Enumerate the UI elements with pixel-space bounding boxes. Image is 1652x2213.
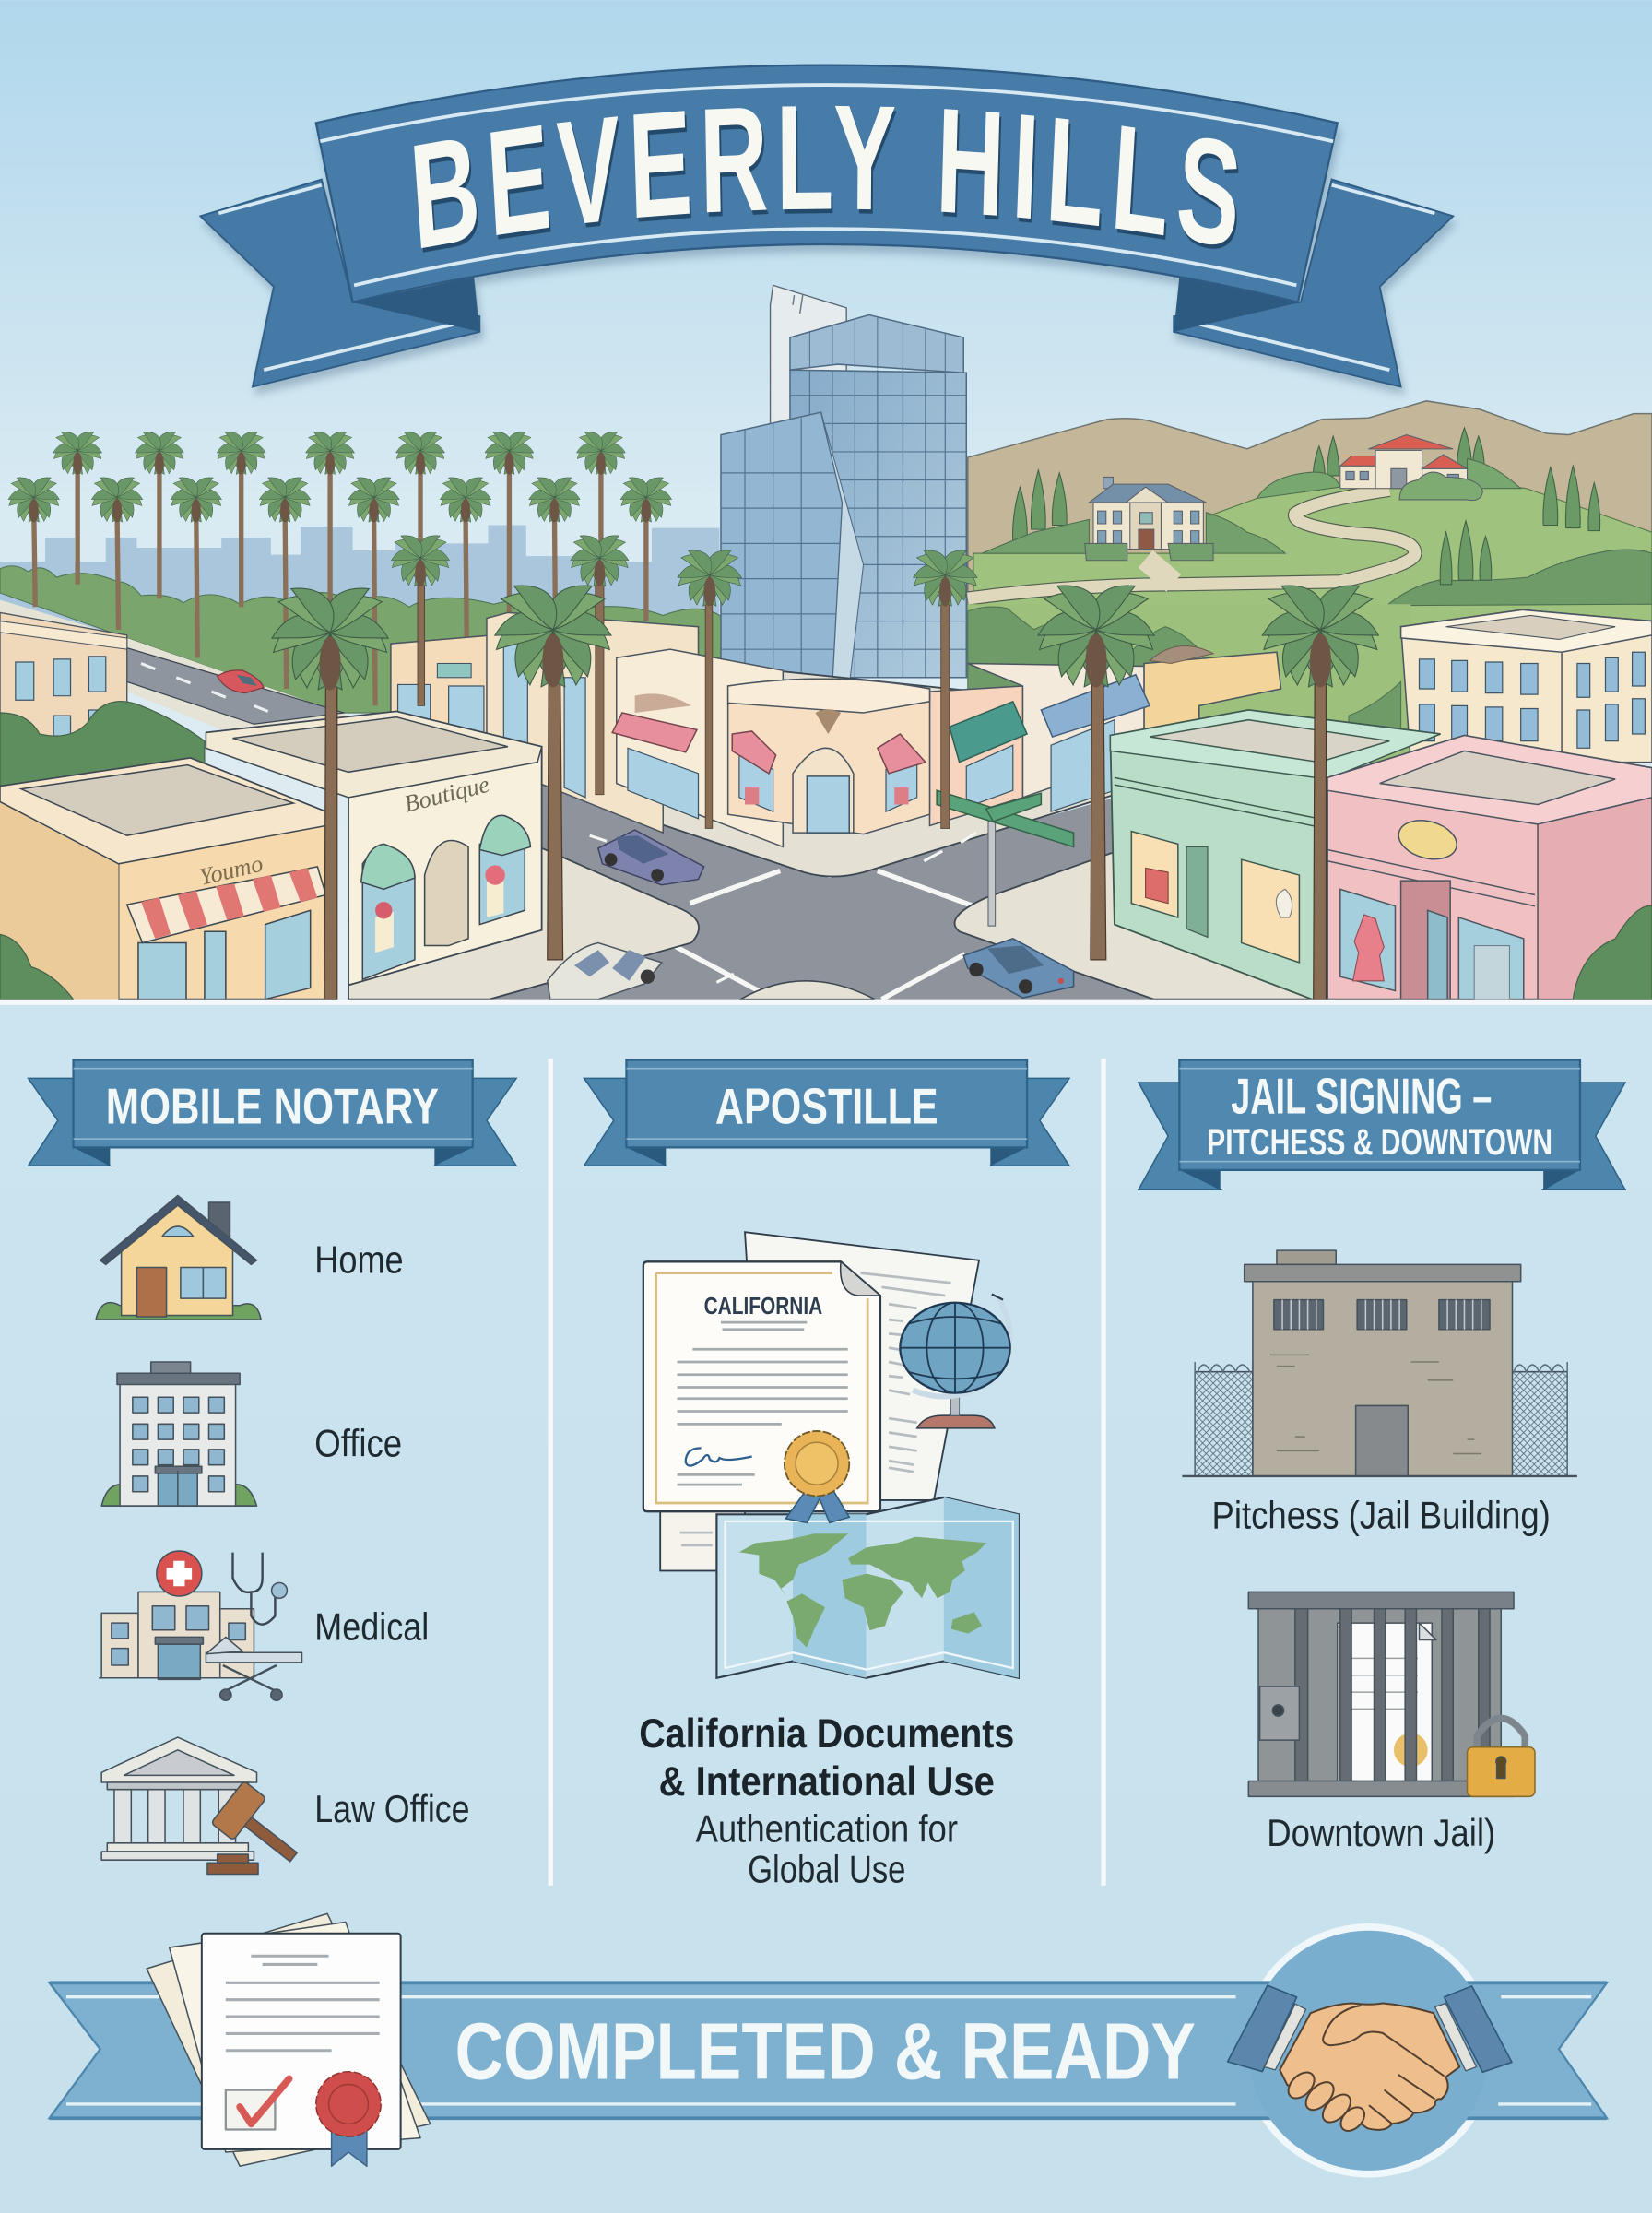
far right cream building xyxy=(1401,609,1652,763)
icon: office xyxy=(101,1362,257,1506)
boutique building: Boutique xyxy=(402,771,492,818)
road intersection xyxy=(479,784,1171,1000)
label: law office: Law Office xyxy=(314,1788,470,1830)
side street xyxy=(0,600,353,748)
label: office: Office xyxy=(314,1423,402,1465)
tan mountains xyxy=(968,401,1652,678)
certificate: CALIFORNIA xyxy=(704,1292,822,1320)
purple car xyxy=(598,830,704,885)
back left shops row xyxy=(391,612,783,846)
corner storefront xyxy=(728,679,929,834)
ribbon: apostille: APOSTILLE xyxy=(715,1077,938,1134)
bush bottom left xyxy=(0,934,74,1000)
top sidewalk xyxy=(539,663,1115,877)
distant city skyline xyxy=(0,526,719,663)
ribbon: mobile notary xyxy=(29,1059,516,1166)
white band between scene and services xyxy=(0,1000,1652,1005)
icon: medical xyxy=(99,1551,301,1700)
street sign xyxy=(937,790,1074,926)
icon: pitchess jail building xyxy=(1182,1250,1577,1476)
silver car xyxy=(548,942,662,1000)
ribbon: jail signing xyxy=(1139,1059,1625,1189)
hedge behind shops middle xyxy=(1122,627,1199,678)
certificate xyxy=(643,1261,880,1511)
main ribbon xyxy=(316,65,1338,302)
apostille caption xyxy=(639,1711,1014,1891)
red car xyxy=(218,670,264,693)
glass skyscraper xyxy=(721,285,966,686)
hedges beside valley mansion xyxy=(982,513,1285,553)
winding driveway xyxy=(968,490,1415,598)
world map xyxy=(716,1497,1019,1678)
hill mansion xyxy=(1340,435,1482,501)
label: pitchess: Pitchess (Jail Building) xyxy=(1212,1495,1551,1537)
pink awning xyxy=(612,713,697,752)
right ribbon tail xyxy=(1174,180,1453,387)
bottom sidewalk xyxy=(740,981,875,1000)
icon: home xyxy=(96,1195,261,1320)
back document xyxy=(745,1232,979,1500)
circle badge xyxy=(1248,1931,1488,2171)
hill bushes xyxy=(1257,459,1521,498)
icon: downtown jail cell xyxy=(1248,1592,1535,1796)
globe xyxy=(900,1295,1010,1428)
back lower sheet xyxy=(660,1496,745,1570)
youmo building xyxy=(0,758,326,1000)
white ring of badge xyxy=(1242,1923,1495,2178)
ribbon band xyxy=(50,1982,1607,2118)
apostille illustration xyxy=(643,1232,1019,1678)
hedges right of the hills xyxy=(1386,550,1652,606)
ribbon: apostille xyxy=(584,1059,1069,1166)
green hills xyxy=(974,480,1652,763)
icon: document stack with seal xyxy=(147,1913,431,2166)
ribbon: mobile notary: MOBILE NOTARY xyxy=(106,1077,439,1134)
mid palm trees xyxy=(390,530,979,829)
left ribbon tail xyxy=(200,180,479,387)
label: downtown jail: Downtown Jail) xyxy=(1267,1812,1495,1854)
ribbon: jail signing: PITCHESS & DOWNTOWN xyxy=(1207,1122,1552,1163)
apostille caption: Global Use xyxy=(748,1849,905,1891)
banner text: COMPLETED & READY xyxy=(455,2006,1196,2096)
title text xyxy=(414,105,1239,253)
large palm trees xyxy=(268,574,1382,1000)
left corner sidewalk xyxy=(348,846,699,1000)
background: lower panel xyxy=(0,1000,1652,2213)
bush lower right xyxy=(1573,905,1652,1000)
valley mansion xyxy=(1085,477,1213,561)
gold seal with ribbon xyxy=(785,1431,849,1522)
right shops row xyxy=(929,645,1281,825)
label: home: Home xyxy=(314,1239,404,1282)
mint green storefront xyxy=(1110,710,1440,1000)
hedge by right building xyxy=(1349,681,1401,734)
column divider left xyxy=(549,1059,553,1886)
pink storefront xyxy=(1328,736,1652,1000)
crosswalks and lane marks xyxy=(590,816,1021,1000)
bushes lower left xyxy=(0,702,205,819)
icon: handshake xyxy=(1228,1985,1512,2136)
apostille caption: Authentication for xyxy=(695,1807,958,1850)
far left building xyxy=(0,612,127,741)
column divider right xyxy=(1101,1059,1106,1886)
blue car xyxy=(963,939,1074,998)
back row palm trees xyxy=(6,427,673,705)
lawn behind shops xyxy=(968,604,1410,763)
lower cypress group xyxy=(1440,521,1492,585)
icon: law office xyxy=(101,1737,312,1876)
title text: BEVERLY HILLS xyxy=(414,105,1239,253)
youmo building: Youmo xyxy=(196,850,266,891)
bottom banner xyxy=(50,1913,1607,2178)
left hedge band xyxy=(0,566,726,713)
title banner xyxy=(199,65,1457,397)
boutique building xyxy=(206,712,542,985)
cypress trees xyxy=(1013,428,1600,543)
apostille caption: & International Use xyxy=(659,1759,995,1805)
apostille caption: California Documents xyxy=(639,1711,1014,1757)
ribbon: jail signing: JAIL SIGNING – xyxy=(1231,1068,1492,1125)
right corner sidewalk xyxy=(954,853,1326,1000)
hedge behind shops left xyxy=(968,607,1115,692)
label: medical: Medical xyxy=(314,1605,429,1648)
street scene illustration xyxy=(0,0,1652,1000)
